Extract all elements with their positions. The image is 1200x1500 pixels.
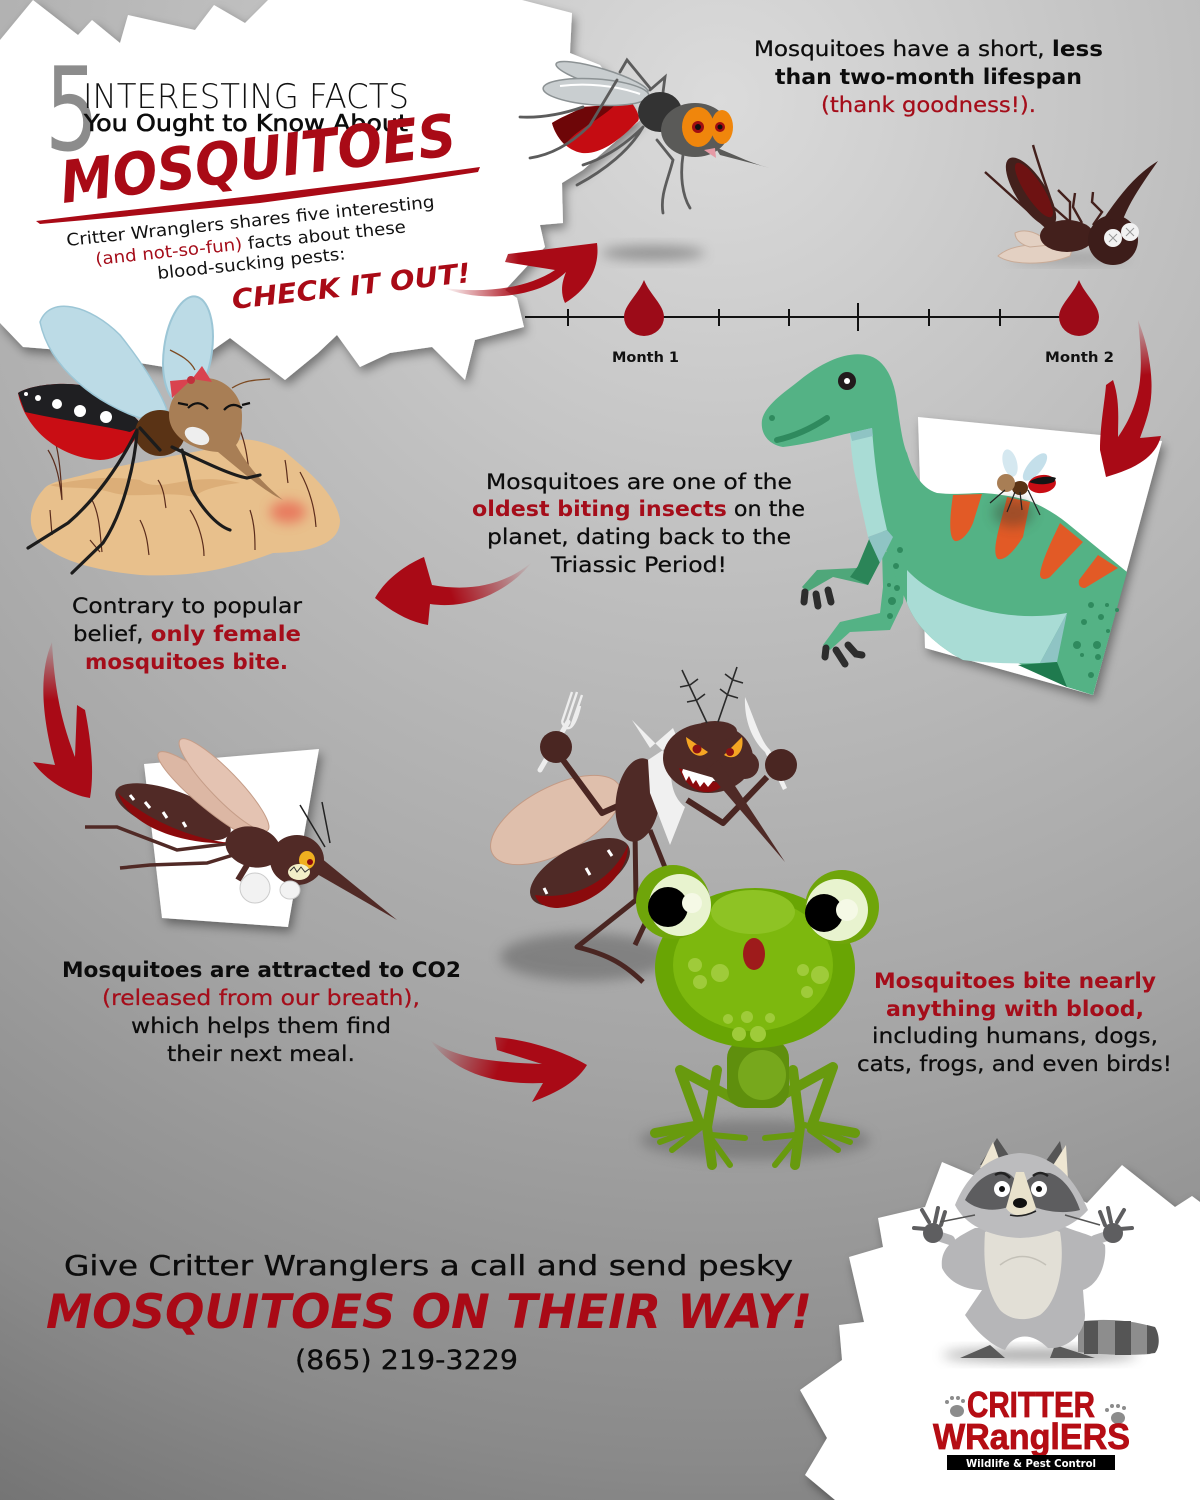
fact 1 text: [754, 37, 1103, 117]
fact 4 text: their next meal.: [167, 1042, 355, 1066]
teeth: [288, 864, 310, 880]
logo critter: CRITTER: [967, 1384, 1095, 1425]
cta line 1: Give Critter Wranglers a call and send pesky: [64, 1249, 793, 1282]
thorax: [610, 755, 666, 845]
blood drop month 1: [624, 280, 664, 336]
fact 3 text: Contrary to popular: [72, 594, 302, 618]
arrow: to frog: [430, 1037, 587, 1102]
intro text: (and not-so-fun) facts about these: [94, 217, 407, 270]
logo wranglers: WRanglERS: [933, 1416, 1130, 1457]
eyes: [636, 865, 710, 939]
wing 1: [40, 306, 167, 418]
wings: [150, 742, 276, 852]
fact 2 text: oldest biting insects on the: [472, 497, 805, 521]
interesting facts line: INTERESTING FACTS: [83, 77, 409, 117]
cta line 2: MOSQUITOES ON THEIR WAY!: [46, 1285, 812, 1340]
panel: raccoon burst: [800, 1162, 1200, 1500]
ground shadow: [640, 1120, 870, 1160]
fists: [540, 731, 572, 763]
fact 4 text: Mosquitoes are attracted to CO2: [62, 958, 461, 982]
head spots: [688, 958, 829, 1042]
fact 5 text: [857, 969, 1172, 1076]
mouth: [743, 938, 765, 970]
legs: [85, 827, 243, 868]
mosquitoes word: MOSQUITOES: [56, 101, 460, 217]
abdomen stripes: [130, 795, 186, 827]
fact 1 text: (thank goodness!).: [821, 93, 1036, 117]
head: [270, 835, 324, 885]
dino body: [762, 354, 1127, 695]
timeline: [525, 280, 1114, 366]
icon: dinosaur: [762, 354, 1127, 695]
tail: [1078, 1320, 1158, 1355]
mouth: [704, 148, 716, 158]
timeline: Month 2: [1045, 350, 1114, 366]
paw right: [1105, 1404, 1126, 1424]
phone: (865) 219-3229: [295, 1345, 518, 1376]
torso: [727, 1040, 789, 1108]
belly: [984, 1227, 1062, 1319]
panel: dinosaur card: [918, 417, 1162, 695]
fact 1 text: Mosquitoes have a short, less: [754, 37, 1103, 61]
fact 4 text: (released from our breath),: [102, 986, 420, 1010]
head: [955, 1153, 1088, 1238]
skin hairs: [48, 425, 316, 556]
small mosquito: [993, 499, 1033, 527]
panel: angry mosquito card: [144, 749, 319, 927]
dino belly: [907, 570, 1067, 663]
eyes: [1104, 229, 1122, 247]
gloves: [240, 873, 270, 903]
bite mark: [270, 501, 306, 523]
intro text: blood-sucking pests:: [156, 244, 346, 284]
toes: [660, 1125, 850, 1165]
head: [655, 888, 855, 1048]
dino eye, nostril and mouth: [838, 372, 856, 390]
head: [663, 723, 753, 793]
mouth: [679, 768, 724, 792]
dino back leg: [802, 537, 880, 592]
eyes: [686, 737, 743, 757]
icon: live mosquito: [520, 55, 770, 260]
arrow: to first mosquito: [444, 243, 598, 303]
eyes: [711, 110, 733, 144]
fact 2 text: Mosquitoes are one of the: [486, 470, 792, 494]
arms: [563, 760, 767, 823]
logo: critter wranglers: [933, 1384, 1130, 1470]
fact 5 text: Mosquitoes bite nearly: [874, 969, 1156, 993]
brush underline: [36, 167, 480, 224]
icon: dead mosquito: [985, 145, 1158, 265]
head: [1088, 215, 1138, 265]
abdomen: [997, 150, 1065, 234]
fact 3 text: [72, 594, 302, 674]
legs: [520, 60, 690, 213]
abdomen: [108, 771, 238, 853]
thorax: [135, 410, 185, 456]
fact 5 text: anything with blood,: [886, 997, 1144, 1021]
logo tagline: Wildlife & Pest Control: [966, 1457, 1096, 1470]
proboscis: [310, 853, 397, 920]
legs: [28, 428, 260, 573]
dino back claws: [804, 590, 831, 606]
icon: frog: [636, 865, 879, 1165]
legs: [655, 1067, 855, 1165]
abdomen: [552, 103, 639, 153]
thorax: [638, 92, 682, 132]
you ought line: You Ought to Know About: [83, 111, 408, 137]
eyes: [178, 403, 250, 410]
fact 3 text: belief, only female: [73, 622, 301, 646]
shadow: [1010, 253, 1130, 263]
body: [942, 1225, 1105, 1350]
shadow: [601, 246, 705, 260]
month labels: Month 1: [612, 350, 679, 366]
dino front leg: [823, 550, 907, 650]
dino spots: [887, 547, 1119, 678]
arrow: to angry mosquito: [33, 642, 92, 798]
antennae: [680, 667, 743, 723]
fact 4 text: which helps them find: [131, 1014, 391, 1038]
abdomen: [18, 384, 142, 460]
teeth: [182, 423, 212, 449]
intro text: [65, 192, 435, 284]
fact 2 text: [472, 470, 805, 577]
intro text: Critter Wranglers shares five interesting: [65, 192, 435, 251]
arms and hands: [935, 1235, 1110, 1240]
logo bar: [947, 1455, 1115, 1470]
fact 5 text: cats, frogs, and even birds!: [857, 1052, 1172, 1076]
fact 4 text: [62, 958, 461, 1066]
horn: [1104, 161, 1158, 222]
abdomen: [520, 824, 640, 920]
numeral 5: 5: [45, 43, 99, 178]
icon: hungry mosquito: [477, 667, 797, 982]
feet: [960, 1345, 1095, 1358]
wing 2: [157, 293, 219, 407]
check it out: CHECK IT OUT!: [230, 258, 472, 316]
wings: [553, 55, 651, 101]
proboscis: [706, 760, 785, 862]
arrow: to dinosaur: [1100, 320, 1161, 477]
legs: [577, 830, 668, 982]
dino front claws: [825, 645, 862, 664]
dino stripes: [950, 494, 1118, 588]
heading: mosquitoes: [36, 101, 480, 224]
fact 2 text: planet, dating back to the: [487, 525, 791, 549]
dino neck: [850, 428, 887, 537]
icon: flying mosquito: [85, 730, 397, 920]
fork: [540, 722, 568, 770]
eyes: [994, 1181, 1010, 1197]
napkin: [632, 720, 685, 845]
fact 5 text: including humans, dogs,: [872, 1024, 1158, 1048]
thorax: [221, 820, 285, 874]
fact 3 text: mosquitoes bite.: [85, 650, 288, 674]
fact 2 text: Triassic Period!: [550, 553, 727, 577]
head: [661, 103, 729, 157]
ears: [980, 1138, 1012, 1165]
skin: [31, 440, 340, 575]
shadow: [500, 933, 670, 981]
heading: 5 interesting facts: [45, 43, 409, 178]
icon: female mosquito on skin: [18, 293, 340, 575]
nose: [1013, 1198, 1027, 1208]
thorax: [1040, 220, 1094, 252]
call to action: [46, 1249, 812, 1376]
bow: [170, 366, 212, 398]
wing: [477, 757, 635, 883]
knife: [745, 697, 787, 790]
eye: [299, 851, 315, 869]
wings: [998, 245, 1072, 263]
blood drop month 2: [1059, 280, 1099, 336]
fact 1 text: than two-month lifespan: [775, 65, 1082, 89]
panel: title burst: [0, 0, 640, 380]
antennae: [300, 802, 330, 847]
paw left: [945, 1396, 965, 1417]
icon: raccoon: [914, 1138, 1159, 1361]
arrow: to female mosquito: [375, 557, 532, 625]
legs: [985, 145, 1102, 228]
head: [169, 378, 283, 500]
